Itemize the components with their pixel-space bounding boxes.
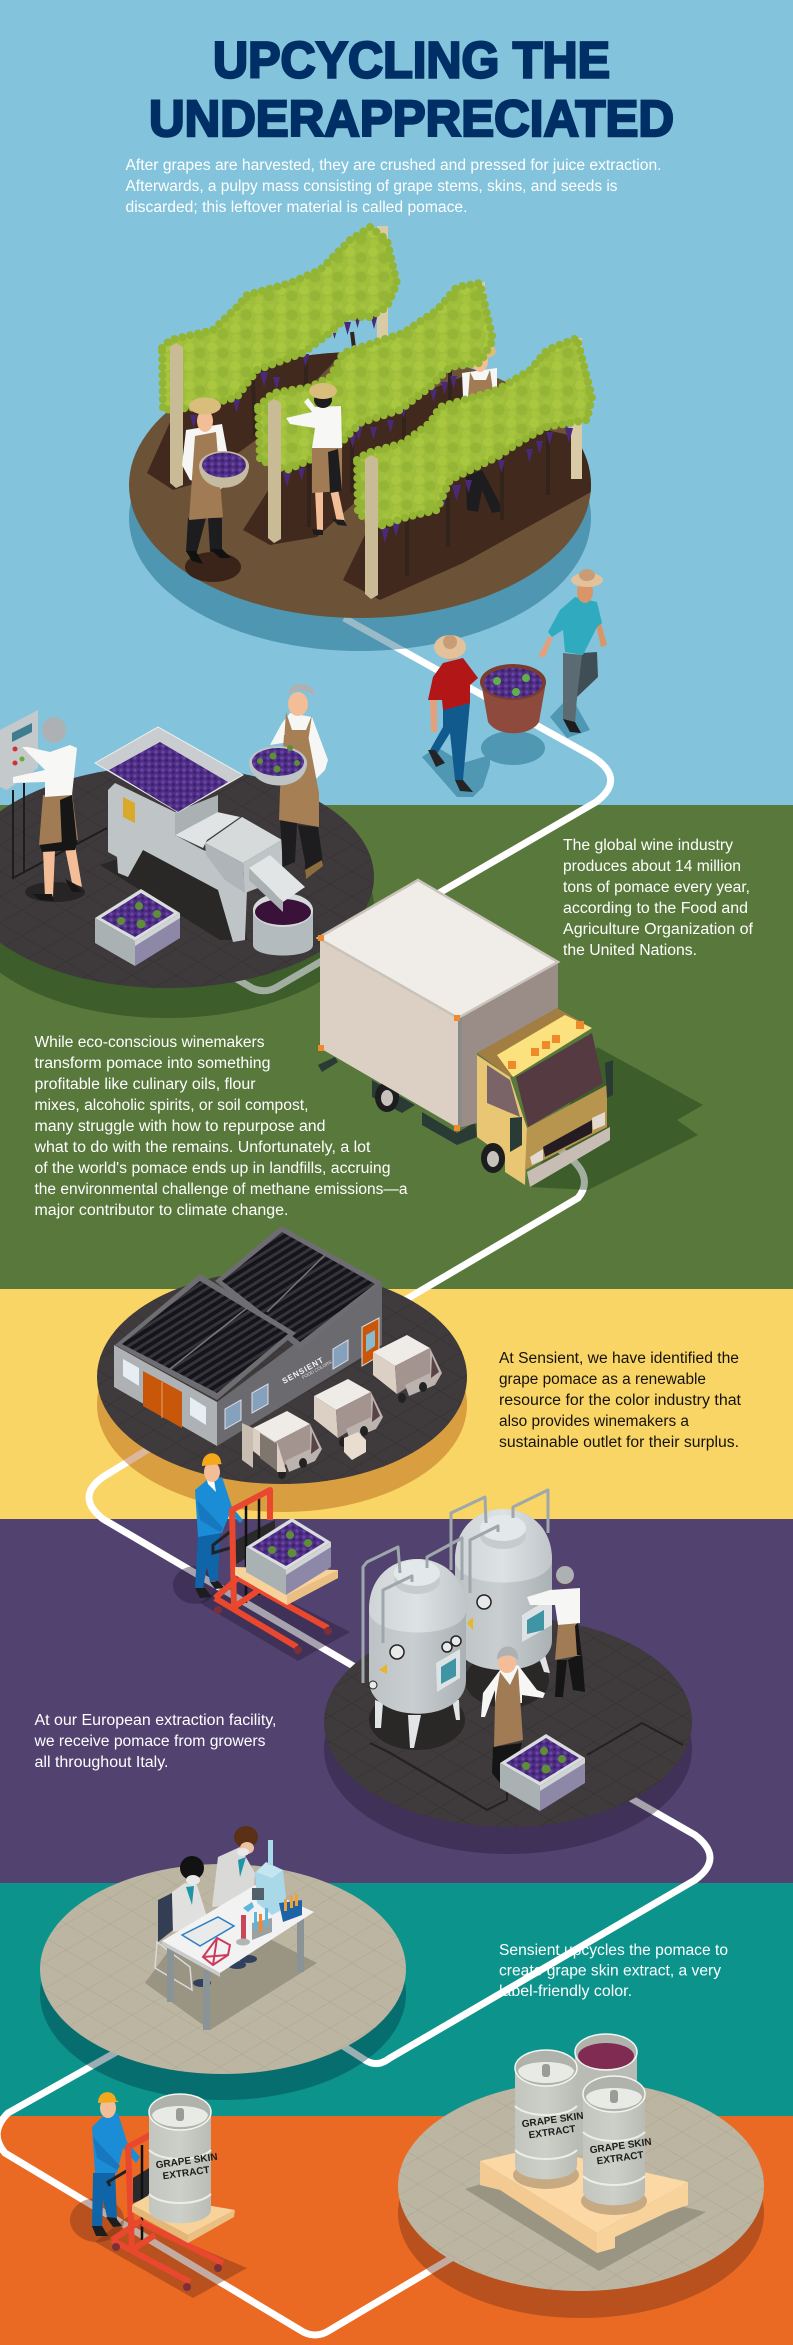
text: Sensient renewable resource: grape pomace as a renewable — [499, 1371, 706, 1388]
keg of extract on forklift: GRAPE SKIN — [155, 2152, 218, 2171]
orange helmet worker — [92, 2092, 140, 2236]
lab table — [162, 1885, 314, 2030]
text: landfill problem: profitable like culinary oils, flour — [34, 1076, 256, 1093]
grape crate — [95, 889, 180, 966]
parked truck near door — [373, 1335, 442, 1403]
title: UPCYCLING THE — [213, 32, 610, 88]
text: landfill problem: mixes, alcoholic spirits, or soil compost, — [34, 1097, 308, 1114]
press chute — [249, 855, 305, 912]
text: landfill problem: what to do with the remains. Unfortunately, a lot — [33, 1139, 371, 1156]
text: European extraction facility — [33, 1712, 276, 1771]
text: European extraction facility: we receive pomace from growers — [33, 1733, 266, 1750]
farmer in red shirt — [428, 635, 478, 792]
forklift shadow — [173, 1566, 350, 1661]
front worker — [481, 1646, 545, 1783]
stage: laboratory — [40, 1826, 406, 2074]
text: Sensient renewable resource: also provides winemakers a — [499, 1413, 689, 1430]
parked truck middle — [314, 1379, 383, 1447]
big pallet — [480, 2148, 688, 2253]
background band: purple — [0, 1519, 793, 1883]
finished goods disc — [398, 2081, 764, 2291]
text: global wine industry fact: the United Nations. — [563, 942, 697, 959]
text: grape skin extract: create grape skin extract, a very — [499, 1962, 721, 1980]
text: Sensient renewable resource — [499, 1350, 742, 1451]
background band: sky — [0, 0, 793, 805]
text: landfill problem — [33, 1034, 408, 1219]
text: European extraction facility: At our European extraction facility, — [34, 1712, 276, 1729]
second rack and flask — [236, 1908, 272, 1946]
factory sign: SENSIENT — [281, 1355, 326, 1386]
vine row 2 — [258, 283, 493, 543]
background band: orange — [0, 2116, 793, 2345]
press disc — [0, 766, 374, 988]
title: UNDERAPPRECIATED — [149, 90, 674, 147]
intro paragraph: After grapes are harvested, they are crushed and pressed for juice extraction. — [126, 157, 662, 174]
disc shadows — [0, 385, 764, 2318]
text: global wine industry fact — [563, 837, 754, 959]
keg left: GRAPE SKIN — [521, 2111, 584, 2130]
grape crate on floor — [500, 1734, 585, 1811]
stage: wine press floor — [0, 684, 374, 988]
farmer in teal shirt — [538, 569, 607, 733]
text: global wine industry fact: The global wine industry — [563, 837, 733, 854]
intro paragraph — [126, 157, 662, 216]
worker with grape bowl — [249, 684, 328, 879]
text: global wine industry fact: produces about 14 million — [563, 858, 741, 875]
text: global wine industry fact: according to the Food and — [563, 900, 748, 917]
front tank — [363, 1538, 466, 1748]
basket shadow — [481, 731, 545, 765]
rear wheel — [375, 1082, 399, 1112]
tank floor shadows — [369, 1652, 549, 1750]
truck shadow — [530, 1047, 703, 1190]
text: landfill problem: major contributor to climate change. — [34, 1202, 288, 1219]
keg left — [513, 2050, 584, 2189]
control panel — [0, 710, 107, 878]
lift mast and forks — [213, 1490, 332, 1654]
test tube rack — [279, 1894, 302, 1922]
stage: Sensient factory — [97, 1226, 467, 1484]
worker picking grapes — [286, 383, 347, 535]
delivery truck — [318, 880, 703, 1190]
walking farmers with basket — [422, 569, 607, 797]
text: Sensient renewable resource: At Sensient, we have identified the — [499, 1350, 739, 1367]
soil row shadows — [147, 340, 600, 600]
intro paragraph: Afterwards, a pulpy mass consisting of grape stems, skins, and seeds is — [126, 178, 618, 195]
text: global wine industry fact: Agriculture Organization of — [563, 921, 754, 938]
pallet under keg — [132, 2195, 235, 2243]
truck cab — [477, 1008, 613, 1187]
text: Sensient renewable resource: resource for the color industry that — [499, 1392, 742, 1409]
tank floor disc — [324, 1617, 692, 1827]
stage: extraction tanks — [324, 1490, 692, 1827]
title — [149, 32, 674, 147]
forklift carrying grape crate — [173, 1453, 350, 1661]
text: grape skin extract: label-friendly color. — [499, 1983, 632, 2000]
worker 3 behind row 3 — [462, 342, 504, 513]
keg with purple liquid — [575, 2034, 637, 2155]
vineyard disc — [129, 352, 591, 618]
text: Sensient renewable resource: sustainable outlet for their surplus. — [499, 1434, 739, 1451]
woven basket of grapes — [480, 664, 546, 733]
truck loading — [242, 1411, 322, 1479]
lab disc — [40, 1864, 406, 2074]
back tank operator — [527, 1566, 585, 1697]
stage: vineyard — [129, 226, 600, 618]
text: landfill problem: of the world's pomace ends up in landfills, accruing — [34, 1160, 390, 1177]
red lift frame — [108, 2134, 223, 2291]
vine row 1 — [162, 227, 397, 488]
factory building: FOOD COLORS — [301, 1359, 333, 1380]
floor piping — [370, 1743, 507, 1810]
standing scientist — [212, 1826, 258, 1969]
factory disc — [97, 1270, 467, 1484]
text: landfill problem: many struggle with how to repurpose and — [34, 1118, 326, 1135]
background band: teal — [0, 1883, 793, 2116]
process path connecting stages — [0, 618, 710, 2335]
back row posts — [377, 226, 582, 479]
microscope — [243, 1840, 287, 1915]
cargo box — [318, 880, 558, 1131]
forklift worker — [195, 1453, 243, 1598]
keg left: EXTRACT — [528, 2124, 576, 2141]
keg of extract on forklift — [149, 2094, 218, 2223]
background band: green — [0, 805, 793, 1289]
keg of extract on forklift: EXTRACT — [162, 2165, 210, 2182]
grape crate on pallet — [246, 1518, 331, 1595]
keg right — [581, 2076, 652, 2215]
truck chassis — [318, 1057, 477, 1145]
small stack of boxes — [344, 1432, 366, 1460]
book on table — [182, 1917, 234, 1946]
chair and seated scientist — [155, 1856, 211, 1990]
pot of grape juice — [253, 893, 313, 956]
wood pallet — [235, 1567, 338, 1605]
worker holding grape bowl — [182, 398, 249, 582]
intro paragraph: discarded; this leftover material is called pomace. — [126, 199, 468, 216]
table shadow — [145, 1935, 317, 2030]
text: landfill problem: transform pomace into something — [34, 1055, 270, 1072]
molecule model — [203, 1938, 230, 1965]
text: grape skin extract: Sensient upcycles the pomace to — [499, 1942, 728, 1959]
background band: yellow — [0, 1289, 793, 1519]
forklift carrying grape skin extract — [70, 2092, 247, 2298]
text: landfill problem: While eco-conscious winemakers — [34, 1034, 265, 1051]
factory building — [114, 1226, 382, 1446]
keg right: EXTRACT — [596, 2150, 644, 2167]
forklift shadow — [70, 2198, 247, 2298]
stage: finished extract — [398, 2034, 764, 2291]
text: European extraction facility: all throughout Italy. — [34, 1754, 168, 1771]
text: global wine industry fact: tons of pomace every year, — [563, 879, 750, 896]
vine row 3 — [357, 338, 592, 599]
big pallet shadow — [465, 2170, 706, 2271]
text: grape skin extract — [499, 1942, 728, 2000]
text: landfill problem: the environmental challenge of methane emissions—a — [34, 1181, 408, 1198]
pomace press machine — [95, 727, 282, 942]
walker shadows — [422, 747, 490, 797]
back tank — [451, 1490, 552, 1673]
keg right: GRAPE SKIN — [589, 2137, 652, 2156]
operator at panel — [13, 717, 85, 902]
